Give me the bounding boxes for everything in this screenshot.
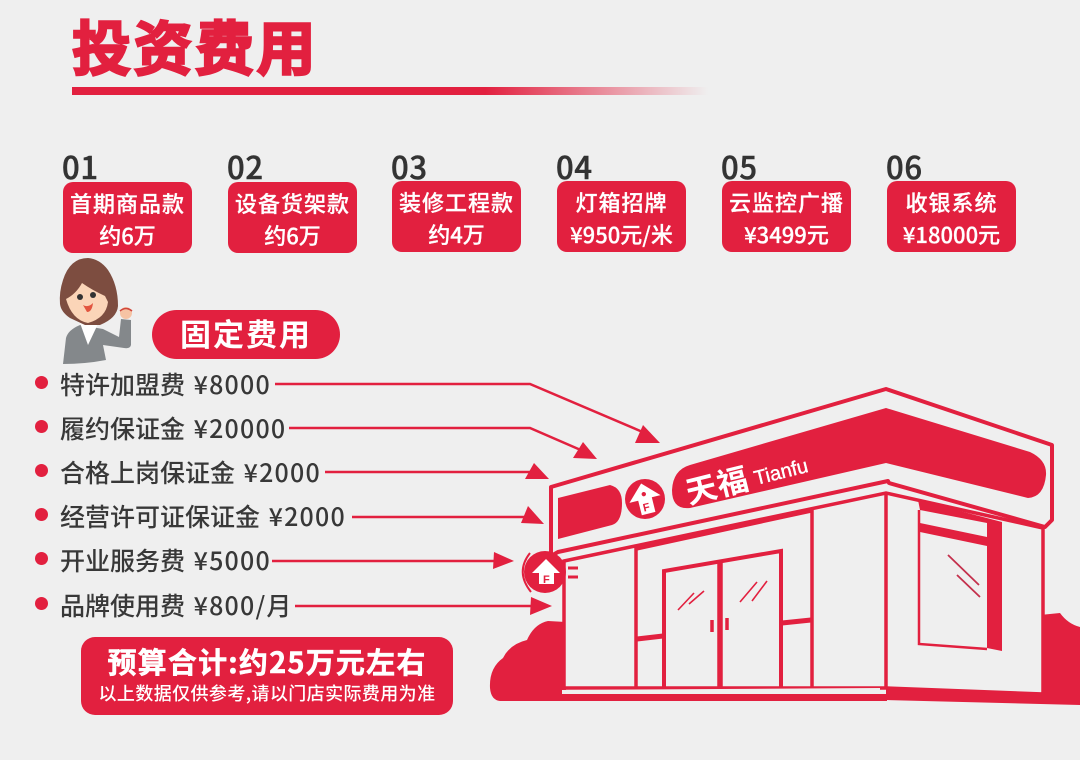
number 04: 04 <box>556 143 593 188</box>
brand name on sign <box>680 454 810 513</box>
number 02: 02 <box>227 143 264 188</box>
icon: woman in suit <box>60 258 132 364</box>
card 04: light box sign: ¥950元/米 <box>570 218 673 250</box>
logo on fascia <box>625 479 665 519</box>
title underline <box>72 87 708 95</box>
round hanging logo sign <box>523 551 578 593</box>
white base strip <box>562 688 880 694</box>
shop window <box>918 500 1002 651</box>
list item: qualification deposit: 合格上岗保证金 ¥2000 <box>60 454 321 490</box>
card 03: renovation: 装修工程款 <box>399 186 514 218</box>
card 02: equipment: 设备货架款 <box>235 187 350 219</box>
budget total box: 以上数据仅供参考,请以门店实际费用为准 <box>99 680 435 706</box>
list item: opening service fee: 开业服务费 ¥5000 <box>60 542 271 578</box>
arrow: franchise fee <box>275 384 660 443</box>
brand name on sign: Tianfu <box>752 455 810 490</box>
list item: license deposit: 经营许可证保证金 ¥2000 <box>60 498 346 534</box>
arrow: performance deposit <box>289 428 597 459</box>
card 06: cash register system: ¥18000元 <box>903 218 1000 250</box>
card 01: first goods <box>63 182 192 253</box>
list item: performance deposit: 履约保证金 ¥20000 <box>60 410 286 446</box>
number 06: 06 <box>886 143 923 188</box>
card 04: light box sign: 灯箱招牌 <box>575 186 668 218</box>
store walls <box>564 493 1043 694</box>
card 01: first goods: 首期商品款 <box>70 187 185 219</box>
fixed costs pill heading: 固定费用 <box>180 310 312 355</box>
card 01: first goods: 约6万 <box>99 219 156 251</box>
card 02: equipment <box>228 182 357 253</box>
number 03: 03 <box>391 143 428 188</box>
card 05: monitoring: 云监控广播 <box>729 186 844 218</box>
number 05: 05 <box>721 143 758 188</box>
fixed costs pill heading <box>152 310 340 359</box>
title: 投资费用 <box>72 2 318 87</box>
card 04: light box sign <box>557 181 686 252</box>
card 06: cash register system: 收银系统 <box>905 186 998 218</box>
card 06: cash register system <box>887 181 1016 252</box>
brand name on sign: 天福 <box>680 454 753 513</box>
budget total box: 预算合计:约25万元左右 <box>107 640 427 682</box>
number 01: 01 <box>62 143 99 188</box>
arrow: brand usage fee <box>295 597 552 615</box>
main sign band <box>672 408 1046 508</box>
card 05: monitoring <box>722 181 851 252</box>
arrow: license deposit <box>352 506 544 524</box>
logo on fascia: F <box>642 501 652 515</box>
list item: brand usage fee: 品牌使用费 ¥800/月 <box>60 587 293 623</box>
bushes and ground <box>490 613 1080 705</box>
left sign panel <box>558 485 622 539</box>
card 05: monitoring: ¥3499元 <box>744 218 829 250</box>
door section frame <box>636 492 886 688</box>
card 03: renovation: 约4万 <box>428 218 485 250</box>
card 03: renovation <box>392 181 521 252</box>
list item: franchise fee: 特许加盟费 ¥8000 <box>60 366 271 402</box>
card 02: equipment: 约6万 <box>264 219 321 251</box>
arrow: qualification deposit <box>325 463 549 479</box>
budget total box <box>81 637 453 715</box>
roof fascia <box>551 389 1052 556</box>
arrow: opening service fee <box>272 552 514 569</box>
round hanging logo sign: F <box>543 574 550 586</box>
